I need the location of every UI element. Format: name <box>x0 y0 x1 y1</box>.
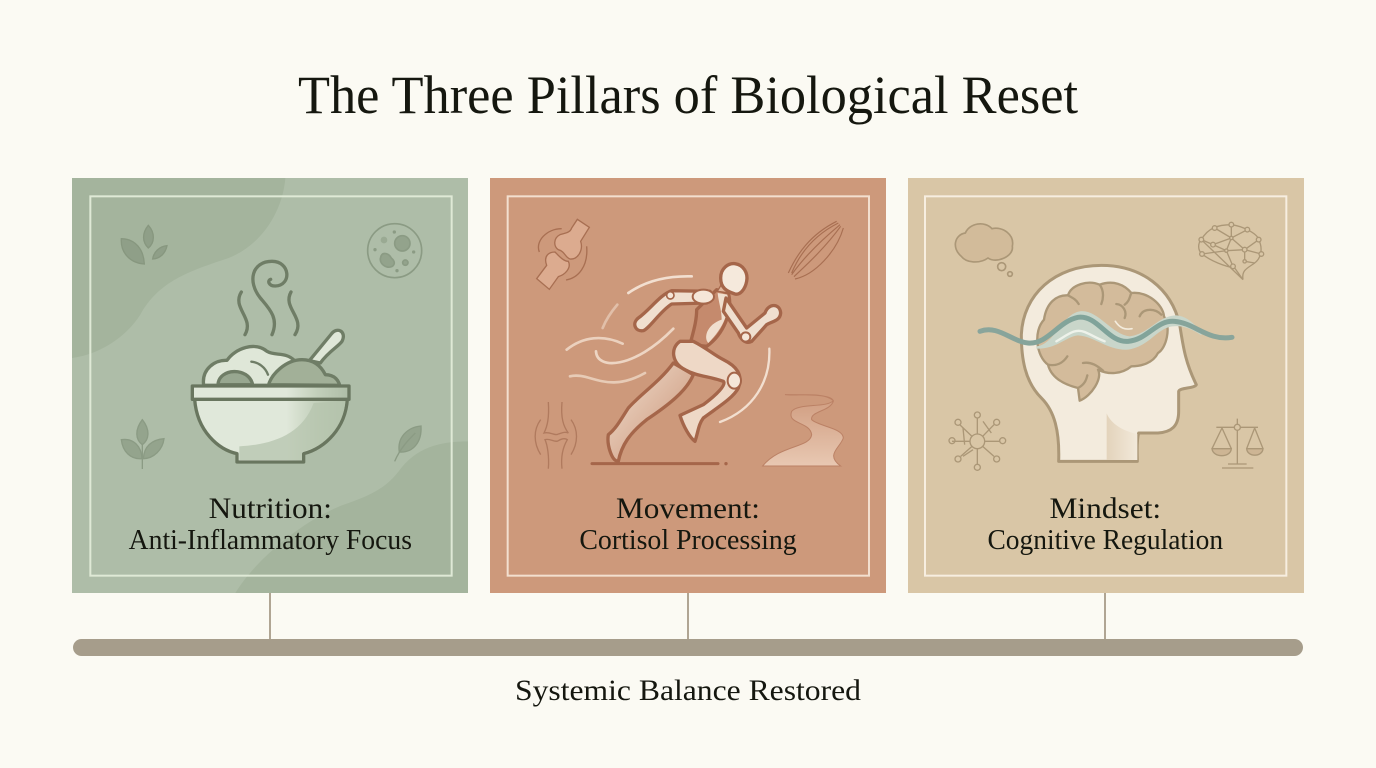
panel heading: Movement: <box>616 492 760 525</box>
panel: nutrition <box>72 178 468 593</box>
icon: knee joint top left <box>537 219 589 289</box>
panel subheading: Cognitive Regulation <box>987 525 1223 556</box>
watercolor blob top left <box>72 178 285 358</box>
panel: movement <box>490 178 886 593</box>
torso highlight <box>706 293 728 343</box>
icon: balance scale <box>1212 419 1263 468</box>
icon: bowl <box>192 386 349 462</box>
icon: nerve network <box>949 412 1006 470</box>
head <box>721 264 747 294</box>
front leg <box>674 341 740 441</box>
panel background <box>72 178 468 593</box>
panel: mindset <box>908 178 1304 593</box>
back leg <box>608 363 693 461</box>
icon: food egg slice <box>218 372 253 385</box>
inner frame <box>508 196 869 576</box>
panel background <box>908 178 1304 593</box>
icon: food green mound <box>269 360 340 385</box>
icon: muscle top right <box>788 221 843 279</box>
icon: brain <box>1037 283 1168 401</box>
caption: Systemic Balance Restored <box>515 674 861 707</box>
icon: motion lines <box>567 276 769 422</box>
torso <box>690 290 730 346</box>
icon: knee joint bottom left <box>535 402 576 469</box>
icon: brain highlight <box>1115 321 1132 329</box>
title: The Three Pillars of Biological Reset <box>298 65 1078 125</box>
icon: network brain <box>1199 222 1264 280</box>
foundation bar <box>73 639 1303 656</box>
inner frame <box>925 196 1286 576</box>
connector stems <box>270 593 1105 640</box>
icon: sprout bottom left <box>121 420 164 469</box>
icon: microbe circle <box>368 224 422 278</box>
icon: ground line <box>592 459 718 468</box>
icon: spoon <box>309 330 343 363</box>
panel subheading: Anti-Inflammatory Focus <box>129 525 412 556</box>
icon: wave <box>980 311 1232 350</box>
icon: head silhouette <box>1021 265 1196 461</box>
panel subheading: Cortisol Processing <box>579 525 797 556</box>
icon: bowl shadow <box>239 401 345 460</box>
icon: single leaf bottom right <box>395 426 421 461</box>
neck <box>717 281 730 293</box>
icon: thought cloud <box>955 224 1013 276</box>
panel background <box>490 178 886 593</box>
icon: steam <box>239 261 298 335</box>
icon: ground dot <box>724 462 728 465</box>
panel heading: Nutrition: <box>209 492 332 525</box>
front arm <box>723 298 781 342</box>
icon: runner <box>608 264 781 461</box>
icon: leaf cluster top left <box>121 225 167 264</box>
icon: food mound <box>203 346 305 385</box>
inner frame <box>90 196 452 576</box>
back arm <box>635 291 710 331</box>
icon: neck shadow <box>1107 413 1137 460</box>
watercolor blob bottom right <box>235 441 468 593</box>
icon: food crease <box>251 362 268 375</box>
panel heading: Mindset: <box>1049 492 1161 525</box>
icon: winding path <box>763 395 843 466</box>
